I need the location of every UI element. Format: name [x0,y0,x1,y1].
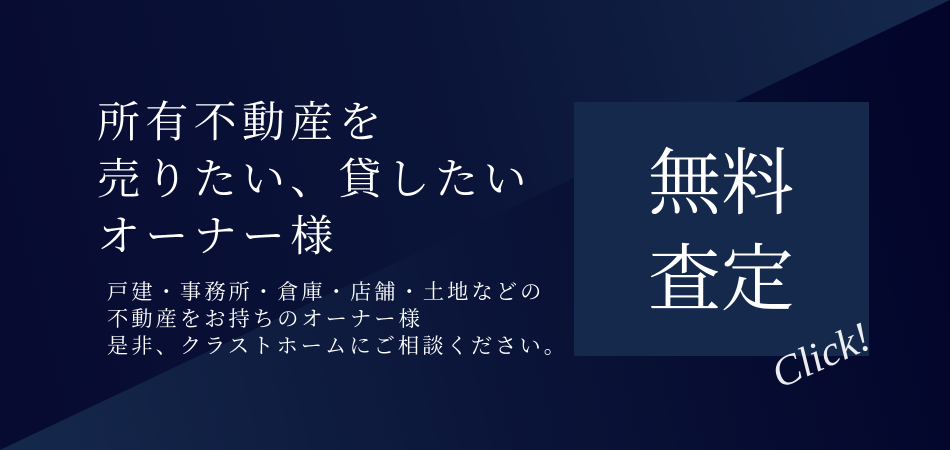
click label: Click! [765,314,878,398]
title: オーナー様 [97,214,338,261]
heading: free assessment: 無料 [648,143,794,224]
heading: free assessment: 査定 [648,239,794,320]
title [97,100,532,261]
title: 所有不動産を [97,100,387,147]
panel: free assessment [574,102,869,356]
title: 売りたい、貸したい [97,157,532,204]
body text: 戸建・事務所・倉庫・店舗・土地などの [107,280,544,304]
body text: 是非、クラストホームにご相談ください。 [107,334,568,358]
heading: free assessment [648,143,794,320]
body text: 不動産をお持ちのオーナー様 [107,307,423,331]
body text [107,280,568,358]
